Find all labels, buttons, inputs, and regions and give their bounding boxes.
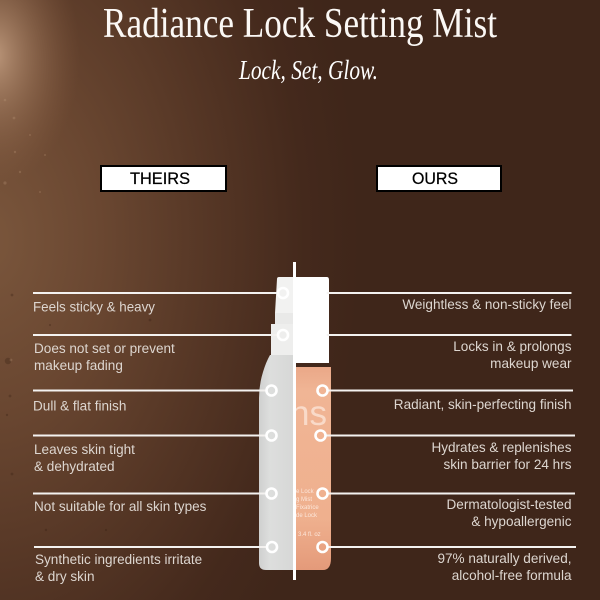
row: makeup wear [33, 330, 572, 373]
ours: Radiant, skin-perfecting finish [394, 397, 572, 412]
theirs [33, 386, 276, 414]
title: Radiance Lock Setting Mist [103, 1, 497, 47]
theirs [33, 288, 288, 314]
row: ingredients [34, 542, 576, 584]
subtitle: Lock, Set, Glow. [238, 55, 378, 85]
badge: ours [377, 166, 501, 191]
badge: theirs: THEIRS [130, 170, 190, 188]
ours: makeup wear [490, 356, 572, 371]
our bottle: peach half: g Mist [296, 497, 312, 503]
ours [318, 488, 575, 529]
row: hydration [33, 430, 575, 474]
theirs: Feels sticky & heavy [33, 300, 155, 314]
our bottle: peach half: e Lock [296, 489, 315, 495]
product bottle [259, 277, 331, 570]
ours [318, 386, 573, 412]
ours [316, 330, 572, 371]
theirs: Synthetic ingredients irritate [35, 552, 202, 567]
theirs: makeup fading [34, 358, 123, 373]
ours [316, 430, 575, 472]
our bottle: peach half [296, 277, 331, 570]
ours: Locks in & prolongs [453, 339, 572, 354]
theirs [33, 430, 276, 474]
row: finish [33, 386, 573, 414]
ours: Weightless & non-sticky feel [402, 297, 572, 312]
badge: theirs [101, 166, 226, 191]
theirs: & dehydrated [34, 459, 115, 474]
theirs [33, 488, 276, 514]
ours [318, 542, 576, 583]
our bottle: peach half: Fixatrice [296, 505, 319, 511]
ours: Hydrates & replenishes [431, 440, 572, 455]
ours: alcohol-free formula [452, 568, 572, 583]
badge: ours: OURS [412, 170, 458, 188]
our bottle: peach half: 3.4 fl. oz [298, 532, 321, 538]
theirs: Not suitable for all skin types [34, 499, 207, 514]
ours: skin barrier for 24 hrs [444, 457, 572, 472]
their bottle: grey half [259, 277, 295, 570]
theirs: & dry skin [35, 569, 94, 584]
ours [316, 288, 572, 312]
theirs [34, 542, 277, 584]
ours: & hypoallergenic [471, 514, 572, 529]
theirs: Dull & flat finish [33, 398, 126, 414]
centre divider [293, 262, 296, 580]
our bottle: peach half: de Lock [296, 513, 318, 519]
theirs [33, 330, 288, 373]
row: stickiness [33, 288, 572, 314]
theirs: Does not set or prevent [34, 341, 175, 356]
row: skin types [33, 488, 575, 529]
theirs: Leaves skin tight [34, 442, 135, 457]
ours: Dermatologist-tested [446, 497, 572, 512]
ours: 97% naturally derived, [437, 551, 572, 566]
our bottle: peach half: ns [290, 394, 327, 433]
